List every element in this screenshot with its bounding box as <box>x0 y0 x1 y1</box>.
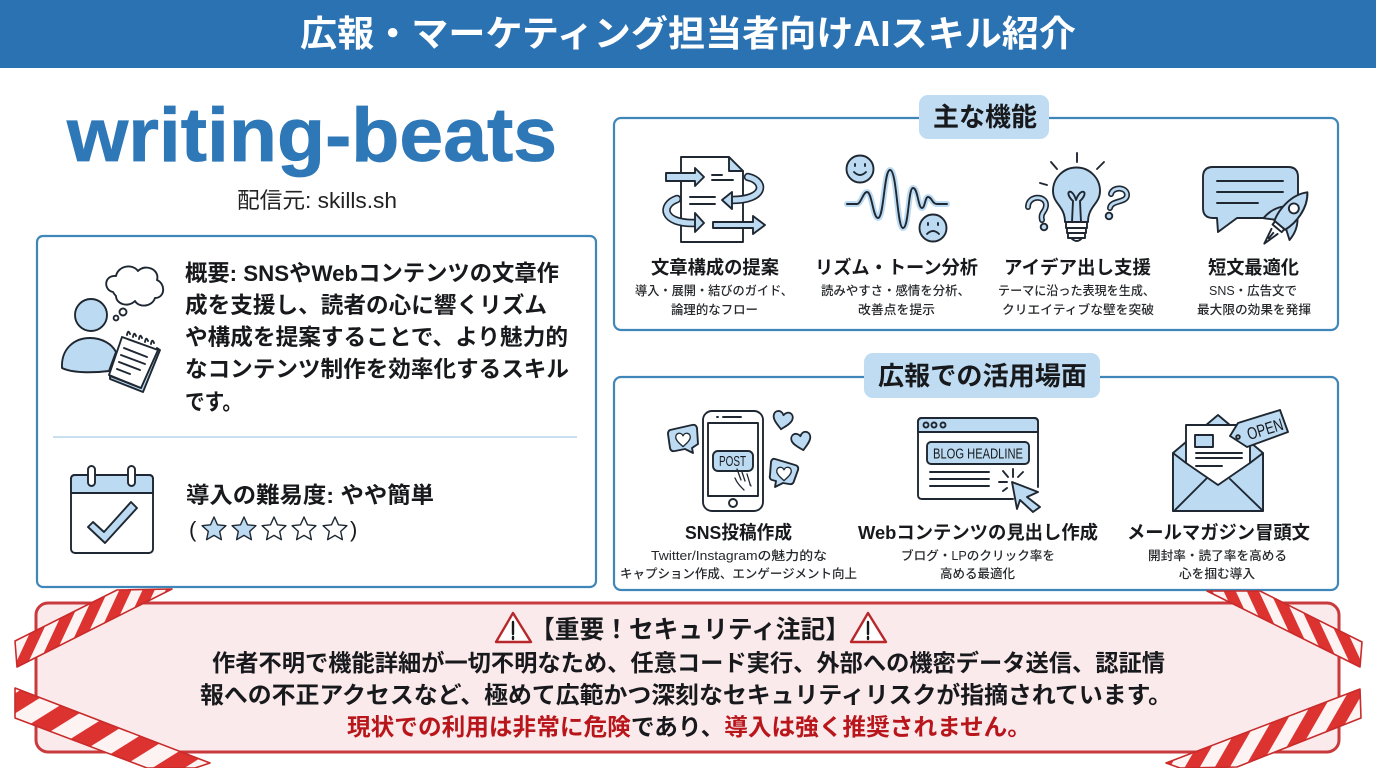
panel: overview <box>37 236 596 587</box>
use case: newsletter: 開封率・読了率を高める <box>1148 548 1287 563</box>
feature: idea support <box>998 257 1155 317</box>
use case: SNS: キャプション作成、エンゲージメント向上 <box>620 566 857 581</box>
icon: phone with post button and hearts: POST <box>719 453 746 470</box>
icon: browser with blog headline <box>918 418 1040 512</box>
icon: rhythm wave with faces <box>846 156 947 242</box>
use case: SNS: Twitter/Instagramの魅力的な <box>651 548 827 563</box>
header bar <box>0 0 1376 68</box>
overview text: 成を支援し、読者の心に響くリズム <box>185 292 547 318</box>
feature: short copy: 最大限の効果を発揮 <box>1197 303 1311 317</box>
feature: rhythm and tone: 改善点を提示 <box>858 302 935 317</box>
heading badge: main features <box>919 95 1049 139</box>
heading badge: use cases: 広報での活用場面 <box>878 361 1087 391</box>
icon: person with thought cloud and notepad <box>62 266 163 392</box>
icon: calendar with check <box>71 466 153 553</box>
icon: warning triangle left <box>496 613 531 642</box>
difficulty stars: ( <box>189 517 197 542</box>
icon: warning triangle right <box>851 613 886 642</box>
overview text: 概要: SNSやWebコンテンツの文章作 <box>185 261 559 286</box>
caution tape: bottom right <box>1166 689 1361 768</box>
icon: open envelope with tag: OPEN <box>1245 415 1286 444</box>
caution tape: bottom left <box>15 688 210 768</box>
feature: short copy <box>1197 257 1311 317</box>
warning body text: 現状での利用は非常に危険であり、導入は強く推奨されません。 <box>347 714 1031 740</box>
overview text: です。 <box>185 390 242 415</box>
feature: short copy: SNS・広告文で <box>1209 283 1297 298</box>
feature: idea support: クリエイティブな壁を突破 <box>1002 302 1154 317</box>
heading badge: use cases <box>864 353 1100 398</box>
feature: short copy: 短文最適化 <box>1208 257 1299 278</box>
use case: web headline <box>858 522 1098 581</box>
panel: main features <box>614 95 1338 330</box>
use case: web headline: Webコンテンツの見出し作成 <box>858 522 1098 543</box>
panel: PR use cases <box>614 353 1338 590</box>
heading badge: main features: 主な機能 <box>933 102 1037 132</box>
skill name: writing-beats <box>66 93 557 178</box>
feature: rhythm and tone: リズム・トーン分析 <box>815 257 978 278</box>
feature: structure: 導入・展開・結びのガイド、 <box>635 283 793 298</box>
caution tape: top right <box>1207 591 1362 667</box>
icon: document flow arrows <box>666 157 765 242</box>
icon: speech bubble with rocket <box>1203 167 1320 255</box>
feature: rhythm and tone: 読みやすさ・感情を分析、 <box>821 283 970 298</box>
warning body text: 報への不正アクセスなど、極めて広範かつ深刻なセキュリティリスクが指摘されています。 <box>200 682 1172 708</box>
feature: structure: 文章構成の提案 <box>651 257 779 278</box>
overview text: や構成を提案することで、より魅力的 <box>185 325 568 350</box>
difficulty text: 導入の難易度: やや簡単 <box>186 483 434 508</box>
difficulty stars: ) <box>350 517 357 542</box>
warning body text <box>200 650 1172 740</box>
panel: security warning <box>36 603 1339 752</box>
feature: idea support: テーマに沿った表現を生成、 <box>998 283 1155 298</box>
use case: web headline: ブログ・LPのクリック率を <box>901 548 1055 563</box>
use case: newsletter: メールマガジン冒頭文 <box>1127 522 1310 543</box>
use case: newsletter <box>1127 522 1310 581</box>
feature: rhythm and tone <box>815 257 978 317</box>
feature: idea support: アイデア出し支援 <box>1004 257 1151 278</box>
icon: open envelope with tag <box>1173 410 1288 511</box>
caution tape: top left <box>15 589 172 667</box>
feature: structure <box>635 257 793 317</box>
difficulty stars <box>189 517 357 542</box>
warning heading: 【重要！セキュリティ注記】 <box>530 616 850 644</box>
warning body text: 作者不明で機能詳細が一切不明なため、任意コード実行、外部への機密データ送信、認証情 <box>212 650 1165 676</box>
source line: 配信元: skills.sh <box>237 188 397 213</box>
feature: structure: 論理的なフロー <box>671 302 758 317</box>
use case: SNS: SNS投稿作成 <box>685 522 792 543</box>
icon: browser with blog headline: BLOG HEADLINE <box>933 446 1023 462</box>
icon: light bulb with question marks <box>1028 153 1127 241</box>
icon: phone with post button and hearts <box>668 410 813 511</box>
overview text <box>185 261 569 415</box>
use case: newsletter: 心を掴む導入 <box>1179 566 1255 581</box>
use case: web headline: 高める最適化 <box>940 566 1015 581</box>
use case: SNS <box>620 522 857 581</box>
title: 広報・マーケティング担当者向けAIスキル紹介 <box>300 13 1076 54</box>
overview text: なコンテンツ制作を効率化するスキル <box>185 357 569 382</box>
